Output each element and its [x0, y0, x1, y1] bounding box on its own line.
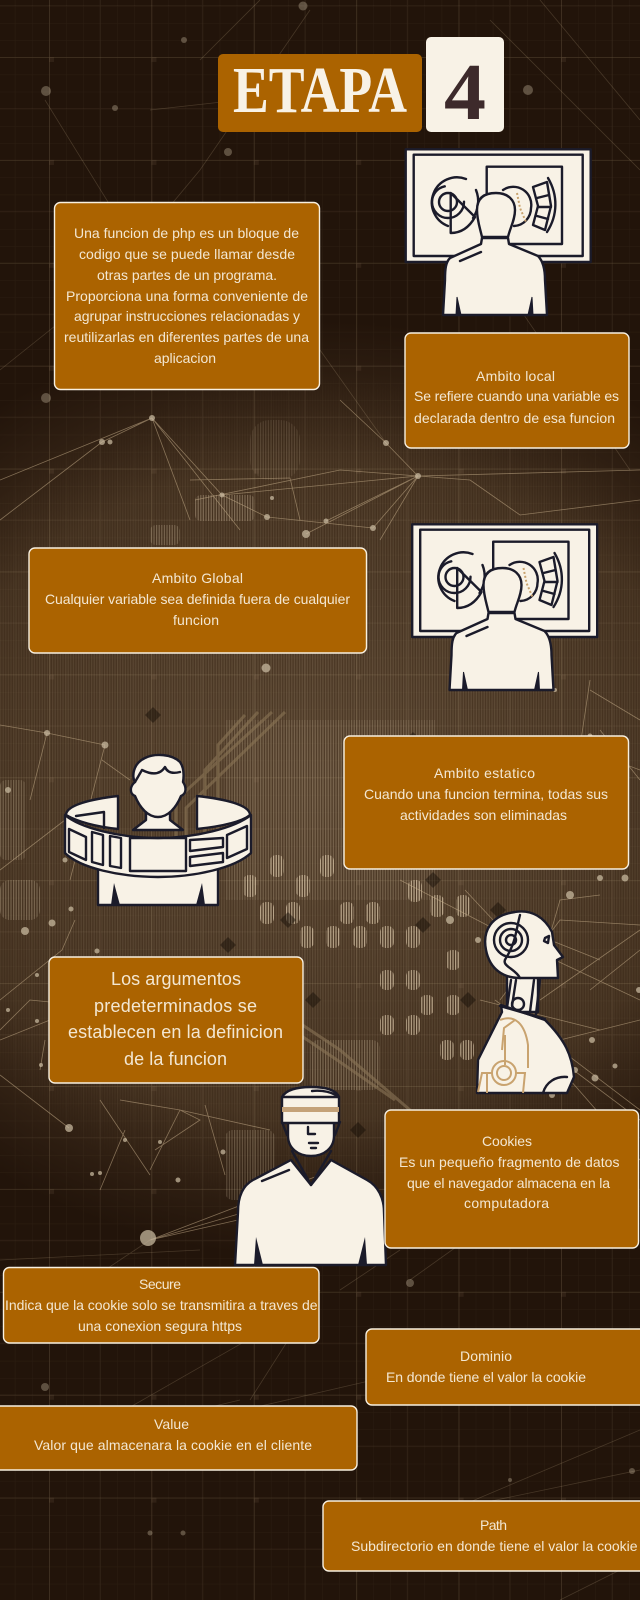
panel: cookies: computadora: [464, 1195, 549, 1211]
panel: definicion de funcion: agrupar instrucciones relacionadas y: [74, 308, 300, 324]
panel: cookies: Cookies: [482, 1133, 532, 1149]
panel: ambito local: [405, 333, 629, 448]
title label: ETAPA: ETAPA: [233, 54, 407, 127]
panel: value: Value: [154, 1416, 189, 1432]
panel: ambito global: [29, 548, 366, 653]
panel: ambito global: funcion: [173, 612, 219, 628]
panel: definicion de funcion: [54, 202, 320, 390]
panel: ambito estatico: actividades son eliminadas: [400, 807, 567, 823]
icon: person at monitor: [406, 149, 591, 315]
panel: value: Valor que almacenara la cookie en el cliente: [34, 1437, 312, 1453]
panel: dominio: En donde tiene el valor la cookie: [386, 1369, 586, 1385]
title number: 4: [426, 37, 504, 137]
panel: definicion de funcion: codigo que se puede llamar desde: [79, 246, 295, 262]
panel: dominio: [366, 1329, 640, 1405]
panel: dominio: Dominio: [460, 1348, 512, 1364]
panel: definicion de funcion: Una funcion de php es un bloque de: [74, 225, 299, 241]
panel: argumentos predeterminados: [49, 957, 303, 1083]
panel: argumentos predeterminados: predeterminados se: [94, 996, 257, 1016]
panel: cookies: [385, 1110, 638, 1248]
panel: definicion de funcion: reutilizarlas en diferentes partes de una: [64, 329, 309, 345]
panel: path: Path: [480, 1517, 507, 1533]
icon: person with VR headset: [235, 1087, 386, 1265]
panel: path: Subdirectorio en donde tiene el valor la cookie: [351, 1538, 638, 1554]
panel: ambito estatico: Cuando una funcion termina, todas sus: [364, 786, 608, 802]
panel: cookies: que el navegador almacena en la: [407, 1175, 610, 1191]
panel: secure: Secure: [139, 1276, 181, 1292]
panel: secure: [4, 1268, 319, 1343]
panel: ambito local: Se refiere cuando una variable es: [414, 388, 619, 404]
panel: argumentos predeterminados: de la funcion: [124, 1049, 227, 1069]
panel: secure: una conexion segura https: [78, 1318, 242, 1334]
panel: ambito local: declarada dentro de esa funcion: [414, 410, 615, 426]
icon: person at monitor, second: [412, 524, 597, 690]
icon: robot profile: [477, 911, 574, 1093]
title number: 4: 4: [444, 49, 486, 137]
panel: ambito global: Cualquier variable sea definida fuera de cualquier: [45, 591, 350, 607]
panel: definicion de funcion: Proporciona una forma conveniente de: [66, 288, 308, 304]
panel: definicion de funcion: otras partes de un programa.: [97, 267, 277, 283]
panel: secure: Indica que la cookie solo se transmitira a traves de: [5, 1297, 318, 1313]
panel: ambito estatico: [344, 736, 628, 869]
panel: argumentos predeterminados: establecen en la definicion: [68, 1022, 283, 1042]
panel: ambito global: Ambito Global: [152, 570, 243, 586]
icon: person with ring display: [65, 755, 251, 905]
panel: ambito estatico: Ambito estatico: [434, 765, 535, 781]
panel: value: [0, 1406, 357, 1470]
panel: argumentos predeterminados: Los argumentos: [111, 969, 241, 989]
panel: ambito local: Ambito local: [476, 368, 555, 384]
panel: cookies: Es un pequeño fragmento de datos: [399, 1154, 620, 1170]
panel: path: [323, 1501, 640, 1571]
panel: definicion de funcion: aplicacion: [154, 350, 216, 366]
